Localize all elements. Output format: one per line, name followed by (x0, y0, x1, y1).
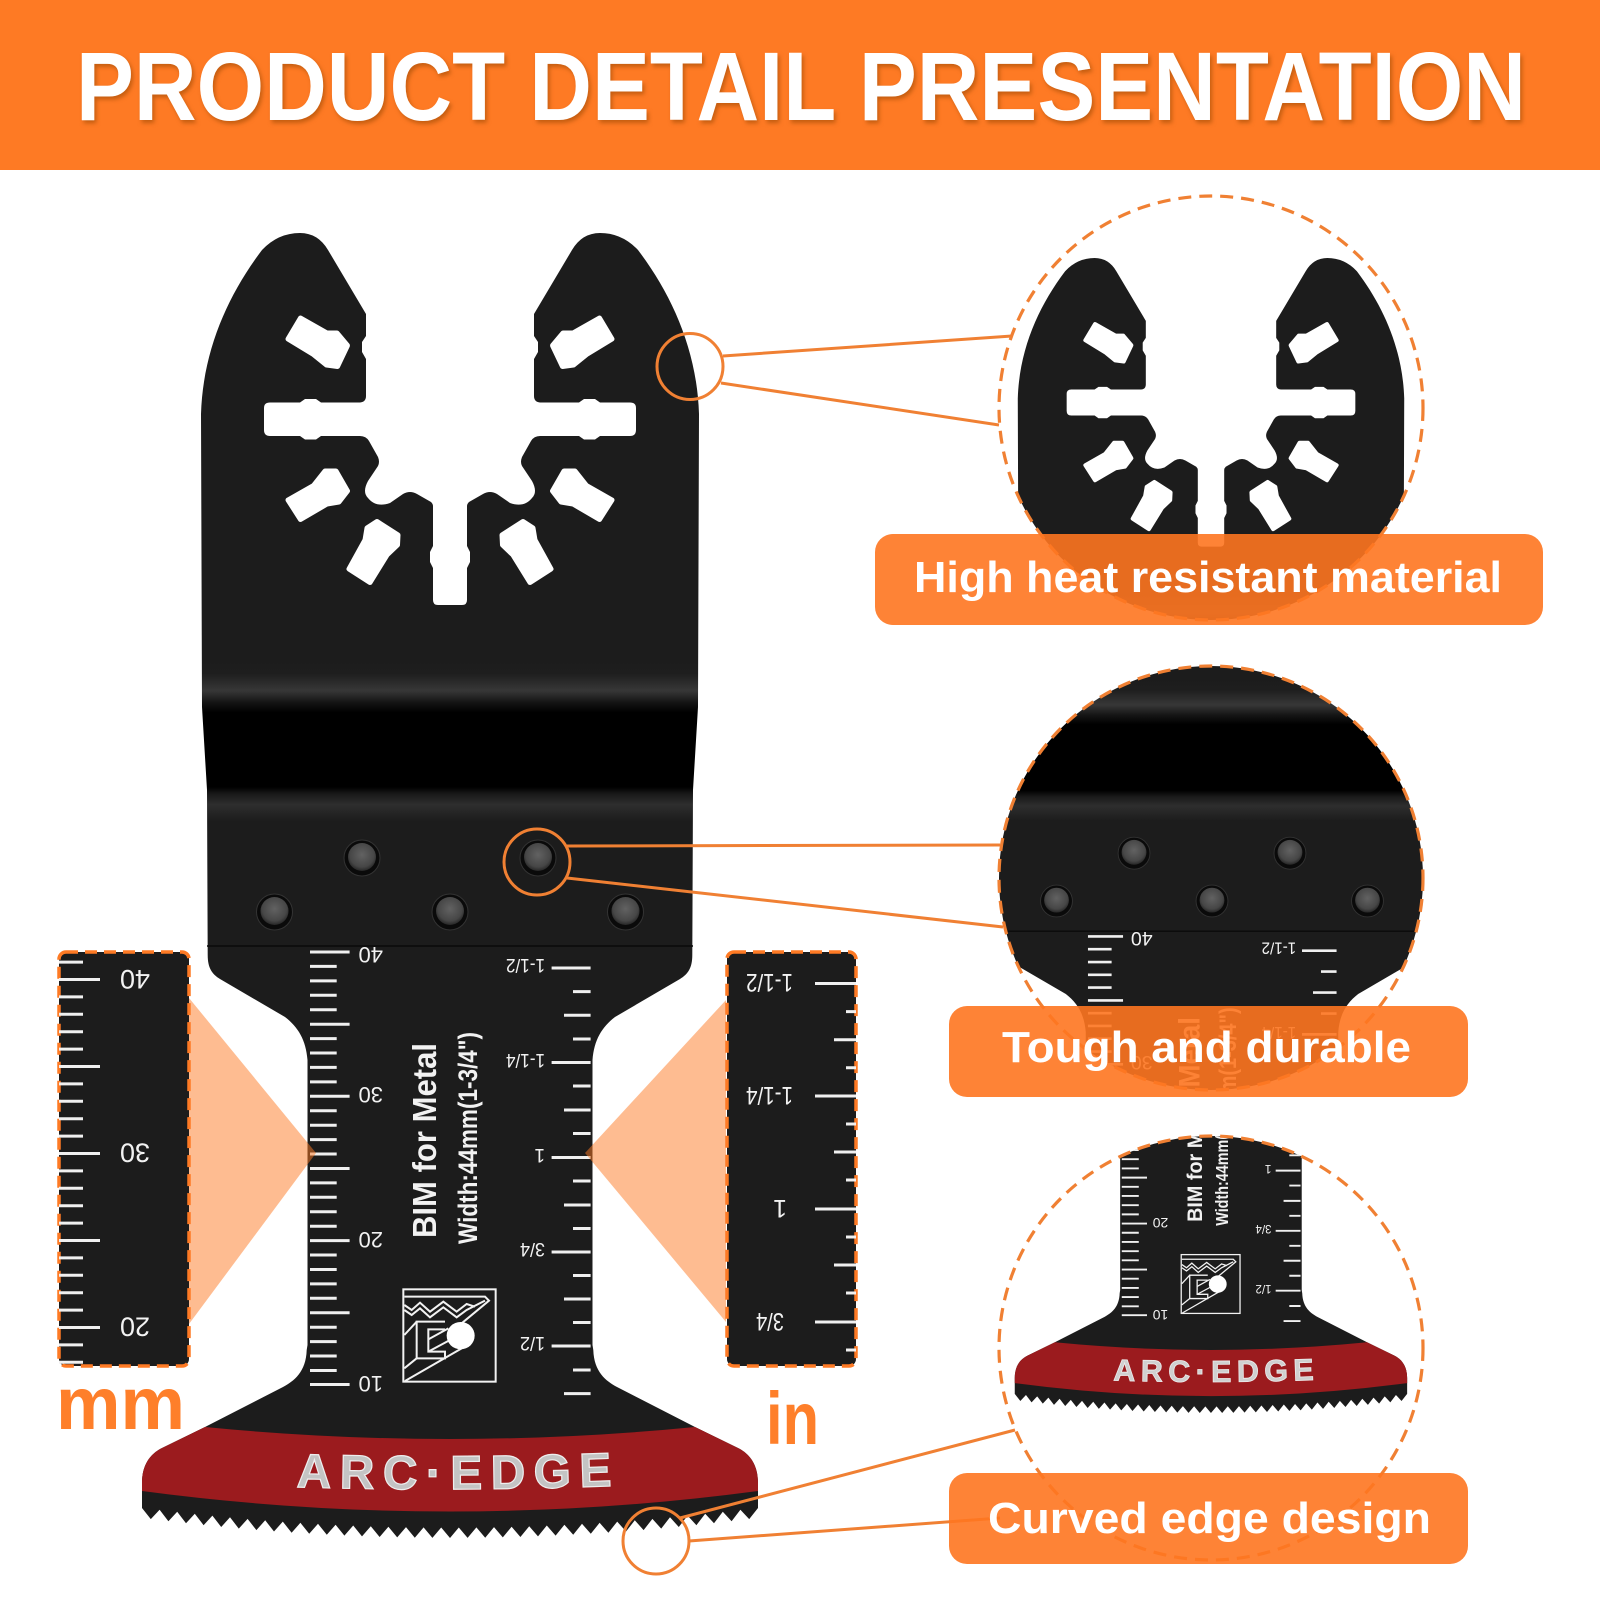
detail circle: rivets: 40 (1131, 927, 1153, 949)
label pill: heat resistance: High heat resistant material (914, 553, 1502, 602)
mm ruler enlargement (59, 952, 189, 1366)
detail circle: rivets (997, 664, 1425, 1092)
main saw blade: 30 (359, 1082, 383, 1107)
label pill: curved edge (949, 1473, 1468, 1564)
main saw blade: 3/4 (520, 1238, 545, 1259)
inch ruler enlargement (727, 952, 856, 1366)
label pill: heat resistance (875, 534, 1543, 625)
main saw blade (142, 233, 758, 1538)
callout: teeth circle and leader lines (623, 1430, 1015, 1574)
detail circle: curved cutting edge: Width:44mm(1-3/4") (1212, 1091, 1232, 1226)
main saw blade: 20 (359, 1227, 383, 1252)
detail circle: curved cutting edge (997, 1134, 1425, 1562)
detail circle: curved cutting edge: 1/2 (1255, 1282, 1271, 1296)
main saw blade: 1-1/2 (506, 954, 545, 975)
main saw blade: 1-1/4 (506, 1049, 545, 1070)
main saw blade: 40 (359, 942, 383, 967)
detail circle: rivets: Width:44mm(1-3/4") (1215, 1007, 1242, 1195)
header banner (0, 0, 1600, 170)
magnifier wedge: inch ruler (585, 1000, 726, 1322)
mm ruler enlargement: 20 (120, 1312, 150, 1342)
inch ruler enlargement: 3/4 (756, 1307, 784, 1335)
detail circle: curved cutting edge: 3/4 (1255, 1222, 1271, 1236)
main saw blade: ARC·EDGE (296, 1452, 611, 1490)
mm ruler enlargement: 40 (120, 964, 150, 994)
label pill: durability (949, 1006, 1468, 1097)
main saw blade: 10 (359, 1371, 383, 1396)
detail circle: curved cutting edge: ARC·EDGE (1113, 1358, 1314, 1382)
callout: rivet circle and leader lines (504, 829, 1003, 927)
detail circle: blade head (997, 194, 1425, 622)
main saw blade: Width:44mm(1-3/4") (453, 1032, 483, 1244)
callout: tip circle and leader lines (657, 334, 1012, 425)
inch ruler enlargement: 1-1/4 (746, 1081, 793, 1109)
detail circle: curved cutting edge: 20 (1152, 1215, 1168, 1231)
detail circle: rivets: 30 (1131, 1051, 1153, 1073)
detail circle: curved cutting edge: 1 (1264, 1162, 1271, 1176)
unit label: in: in (766, 1377, 819, 1460)
magnifier wedge: mm ruler (189, 998, 316, 1324)
detail circle: rivets: 1-1/2 (1262, 939, 1296, 958)
detail circle: curved cutting edge: 10 (1152, 1307, 1168, 1323)
main saw blade: BIM for Metal (406, 1043, 443, 1238)
main saw blade: 1/2 (520, 1332, 545, 1353)
main saw blade: 1 (534, 1144, 545, 1165)
inch ruler enlargement: 1 (773, 1194, 787, 1222)
detail circle: curved cutting edge: BIM for Metal (1184, 1098, 1207, 1222)
unit label: mm: mm (56, 1362, 185, 1445)
mm ruler enlargement: 30 (120, 1138, 150, 1168)
label pill: curved edge: Curved edge design (988, 1494, 1431, 1543)
label pill: durability: Tough and durable (1002, 1023, 1411, 1072)
detail circle: rivets: BIM for Metal (1175, 1017, 1207, 1190)
detail circle: rivets: 1-1/4 (1262, 1023, 1296, 1042)
inch ruler enlargement: 1-1/2 (746, 968, 793, 996)
